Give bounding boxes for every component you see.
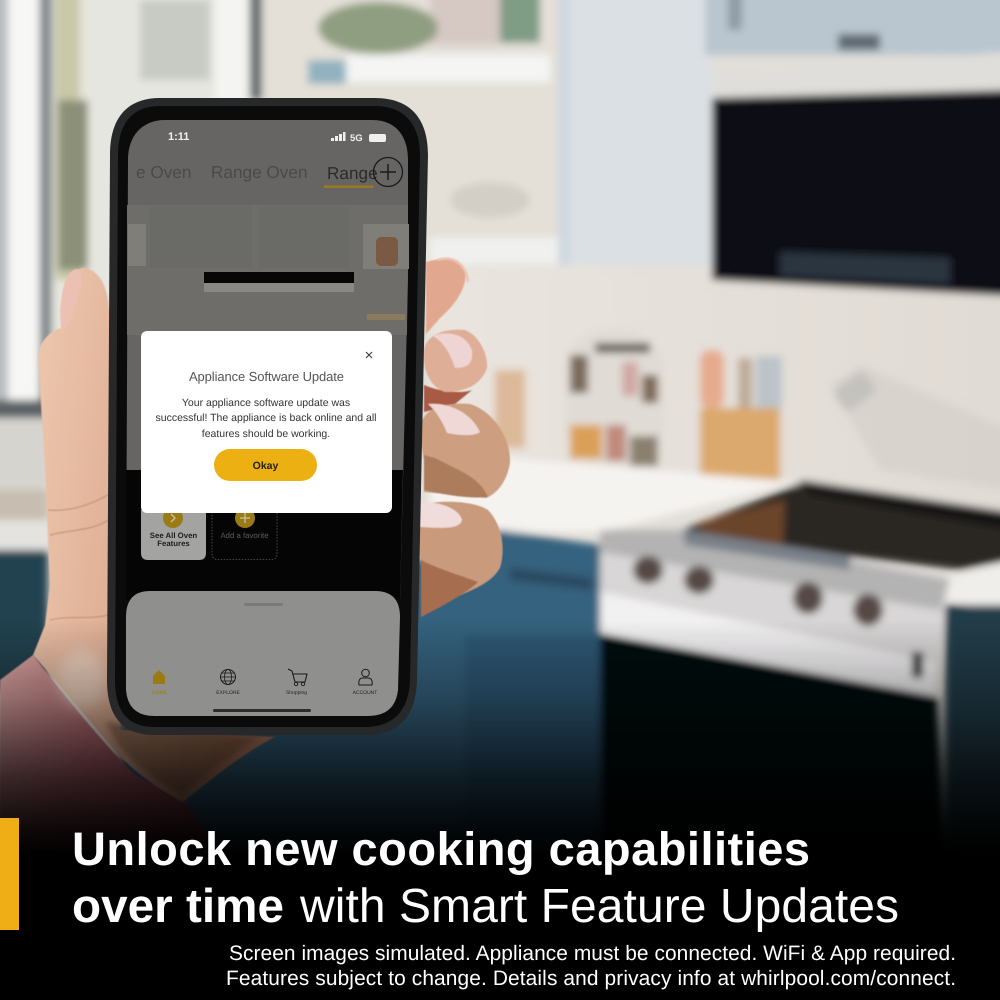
yellow accent bar	[0, 818, 19, 930]
nails	[433, 333, 472, 368]
finger 4	[411, 502, 503, 617]
finger 2	[424, 330, 487, 392]
headline: with Smart Feature Updates	[299, 880, 899, 933]
headline	[72, 822, 899, 933]
headline: Unlock new cooking capabilities	[72, 822, 810, 875]
disclaimer: Screen images simulated. Appliance must be connected. WiFi & App required.	[229, 942, 956, 965]
knuckle shadow between fingers	[424, 385, 472, 412]
finger 1	[426, 259, 465, 334]
countertop	[430, 452, 800, 540]
cabinets in app photo	[150, 206, 252, 268]
tabs	[136, 162, 378, 183]
wrist highlight	[58, 650, 106, 710]
headline: over time	[72, 880, 284, 933]
bottom fade to black	[0, 620, 1000, 855]
modal dialog	[141, 331, 392, 513]
add button	[374, 158, 402, 186]
disclaimer: Features subject to change. Details and privacy info at whirlpool.com/connect.	[226, 967, 956, 990]
screen	[126, 120, 409, 716]
tabs: Range Oven	[211, 162, 308, 182]
feature cards	[141, 505, 277, 560]
spice rack	[565, 330, 665, 466]
status bar: 1:11	[168, 131, 189, 143]
finger 3	[421, 404, 510, 498]
black caption band	[0, 852, 1000, 1000]
hand holding phone	[0, 259, 510, 860]
lower finger 3 segment	[424, 455, 488, 498]
phone body	[107, 98, 428, 735]
close icon	[366, 352, 372, 358]
bottom navigation sheet	[126, 591, 400, 716]
sleeve	[0, 655, 210, 860]
cooktop	[683, 483, 1000, 570]
hood	[204, 272, 354, 283]
window frame and view	[0, 0, 262, 690]
upper cabinet	[705, 0, 1000, 55]
lower finger 4 segment	[421, 560, 478, 617]
nav: explore	[216, 670, 240, 696]
thumb nail	[61, 269, 82, 330]
okay button: Okay	[253, 460, 279, 472]
open shelf with plants	[262, 0, 562, 290]
range control panel	[600, 530, 950, 695]
shadow under phone	[105, 722, 260, 795]
backsplash	[430, 265, 1000, 520]
nav: shopping: Shopping	[286, 690, 307, 696]
oven door	[600, 634, 945, 860]
wrist creases	[48, 495, 108, 620]
feature cards: See All Oven	[150, 531, 197, 540]
status bar: 5G	[350, 133, 363, 144]
okay button	[214, 449, 317, 481]
microwave	[712, 52, 1000, 98]
feature cards: Features	[157, 539, 190, 548]
utensil crock	[700, 350, 782, 488]
palm and thumb	[33, 268, 275, 802]
nav: account: ACCOUNT	[353, 690, 377, 696]
modal body	[155, 397, 377, 440]
white cabinet	[560, 0, 712, 282]
screen background	[126, 120, 408, 600]
modal body: successful! The appliance is back online and all	[155, 412, 377, 424]
nav: explore: EXPLORE	[216, 690, 240, 696]
nav: shopping	[286, 669, 307, 696]
jar	[376, 237, 398, 266]
nav: home: HOME	[152, 690, 168, 696]
nav: account	[353, 669, 377, 696]
modal body: Your appliance software update was	[182, 397, 350, 409]
tabs: e Oven	[136, 162, 191, 182]
tabs: Range	[327, 163, 378, 183]
status bar	[168, 131, 386, 144]
nav: home	[152, 670, 168, 696]
dark lower portion	[126, 470, 403, 600]
disclaimer	[226, 942, 956, 990]
feature cards: Add a favorite	[220, 531, 269, 540]
blue base cabinets	[120, 530, 600, 850]
modal title: Appliance Software Update	[189, 369, 344, 384]
modal body: features should be working.	[202, 428, 330, 440]
phone	[107, 98, 428, 735]
